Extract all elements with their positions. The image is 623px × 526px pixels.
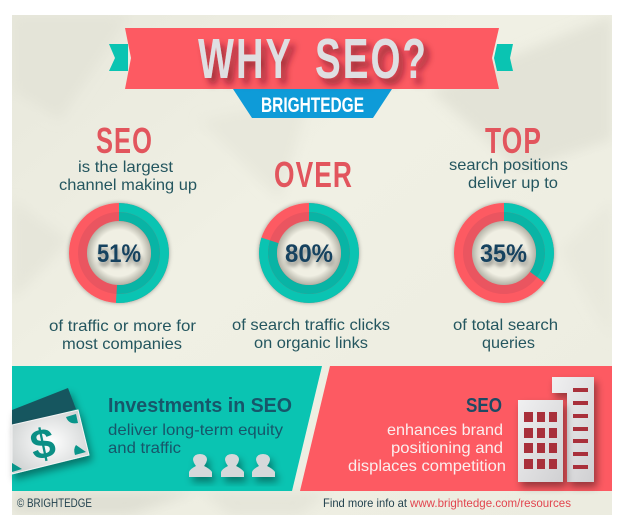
brand tag: BRIGHTEDGE (261, 94, 364, 117)
icon: buildings (518, 377, 594, 482)
description (348, 422, 506, 475)
footer: more info link: Find more info at (323, 496, 408, 510)
intro text (59, 159, 197, 194)
caption (232, 317, 390, 352)
ribbon tab: right (494, 44, 513, 71)
caption: of total search (453, 317, 558, 334)
caption (453, 317, 558, 352)
intro text (449, 157, 568, 192)
donut chart 51% (69, 203, 169, 303)
description (108, 422, 283, 457)
ribbon tab: left (109, 44, 128, 71)
description: and traffic (108, 440, 181, 457)
column: TOP 35% (449, 120, 568, 352)
heading: SEO (466, 395, 502, 417)
footer: copyright: © BRIGHTEDGE (17, 496, 92, 510)
caption: of search traffic clicks (232, 317, 390, 334)
intro text: channel making up (59, 177, 197, 194)
heading: OVER (274, 154, 353, 195)
donut chart 35%: 35% (480, 240, 527, 268)
caption: of traffic or more for (49, 318, 197, 335)
footer: more info link: www.brightedge.com/resources (409, 496, 571, 510)
caption: on organic links (254, 335, 368, 352)
intro text: search positions (449, 157, 568, 174)
panel: investments (12, 366, 322, 491)
intro text: deliver up to (468, 175, 558, 192)
header ribbon (109, 27, 513, 118)
icon: money: $ (26, 418, 59, 469)
icon: people (189, 454, 275, 477)
donut chart 51%: 51% (97, 240, 141, 268)
column: SEO 51% (49, 120, 197, 353)
description: enhances brand (387, 422, 503, 439)
caption: most companies (62, 336, 182, 353)
description: displaces competition (348, 458, 506, 475)
title (198, 27, 428, 91)
intro text: is the largest (78, 159, 174, 176)
ribbon body (125, 28, 499, 89)
donut chart 80% (259, 203, 359, 303)
heading: SEO (96, 120, 153, 161)
title: WHY (198, 27, 293, 91)
panel: brand positioning (300, 366, 612, 491)
column: OVER 80% (232, 154, 390, 352)
heading: Investments in SEO (108, 395, 292, 417)
heading: TOP (485, 120, 542, 161)
caption (49, 318, 197, 353)
description: positioning and (391, 440, 503, 457)
donut chart 80%: 80% (285, 240, 333, 268)
description: deliver long-term equity (108, 422, 283, 439)
footer: more info link (323, 496, 571, 510)
title: SEO? (315, 27, 428, 91)
brand tag (233, 89, 392, 118)
donut chart 35% (454, 203, 554, 303)
caption: queries (482, 335, 535, 352)
icon: money (12, 388, 89, 474)
